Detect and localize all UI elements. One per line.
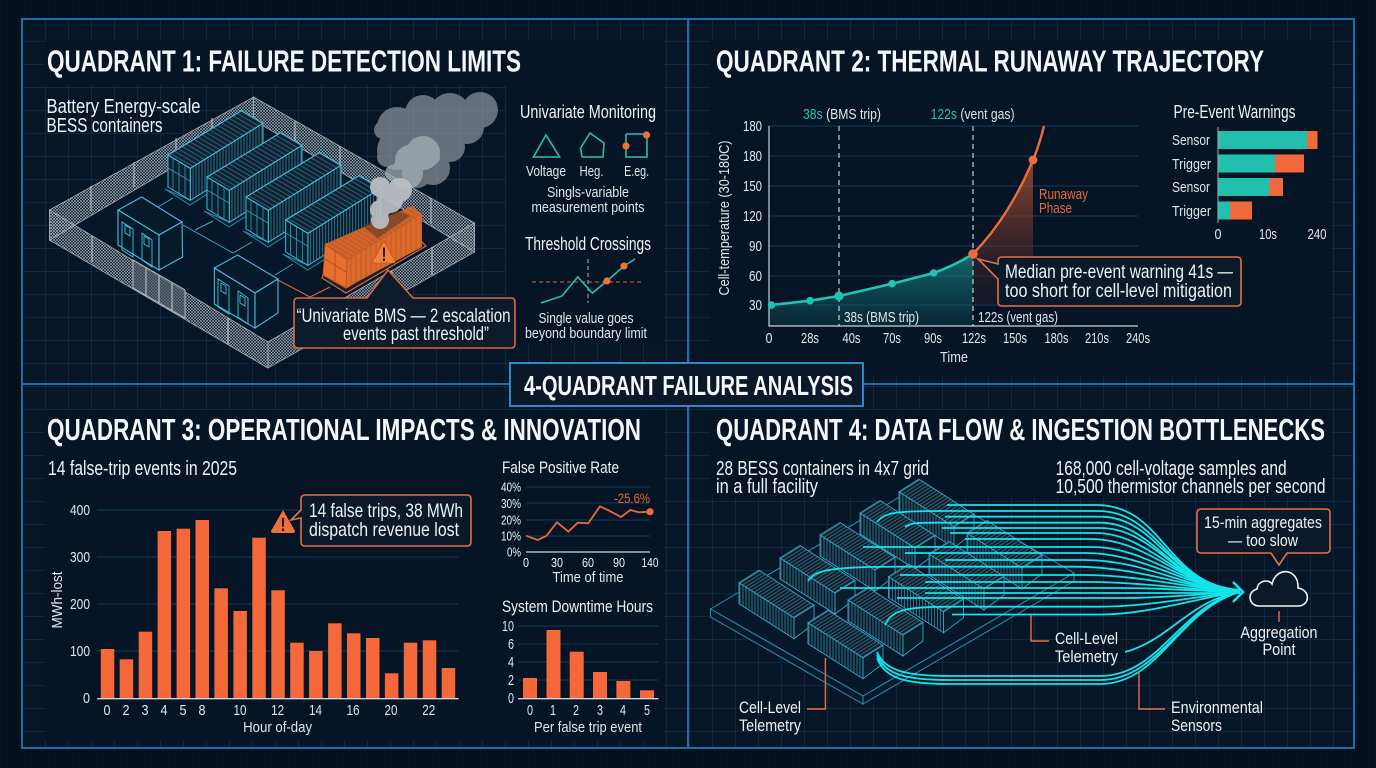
smoke plume [370, 92, 498, 229]
bar labels: Trigger [1172, 203, 1211, 220]
text: sample rate: 168,000 cell-voltage samples and [1056, 458, 1287, 480]
text: false trip count: 14 false-trip events in 2025 [48, 458, 237, 480]
text: facility caption: BESS containers [46, 115, 162, 137]
callout: 15-min aggregates: 15-min aggregates [1204, 513, 1322, 532]
callout: dispatch revenue lost: 14 false trips, 38 MWh [309, 500, 463, 522]
chart: false positive rate line: -25.6% [614, 490, 650, 506]
icon: warning triangle [373, 241, 395, 266]
subheading: threshold crossings: Threshold Crossings [525, 234, 651, 254]
callout: median warning [978, 257, 1241, 306]
icon: cloud [1250, 572, 1307, 606]
label: cell-level telemetry left: Telemetry [739, 716, 801, 735]
text: boundary note [525, 310, 648, 342]
x axis labels: 0 [104, 702, 110, 719]
icon labels [526, 163, 649, 180]
icon: heat pentagon [581, 133, 604, 157]
label: cell-level telemetry centre: Cell-Level [1055, 629, 1118, 648]
x labels: 140 [642, 555, 658, 570]
icon labels: E.eg. [624, 163, 649, 180]
y axis labels: 200 [70, 596, 90, 613]
text: facility grid: in a full facility [716, 476, 818, 498]
x axis labels: 150s [1003, 330, 1027, 347]
bar: trigger 2 [1218, 202, 1252, 220]
x axis labels [104, 702, 435, 719]
x labels [527, 702, 650, 719]
label: runaway phase: Runaway [1039, 186, 1088, 203]
illustration: fenced isometric BESS yard [50, 92, 498, 368]
x labels: 0 [523, 555, 529, 570]
icon: warning triangle: ! [382, 245, 386, 266]
x axis labels: 180s [1044, 330, 1068, 347]
text: measurement points: Singls-variable [547, 184, 629, 201]
callout: univariate BMS: events past threshold” [343, 323, 489, 345]
x axis labels: 8 [198, 702, 206, 719]
y labels [502, 618, 514, 707]
data flow lines [808, 505, 1240, 684]
icon: warning triangle: ! [280, 515, 286, 535]
label: aggregation point: Aggregation [1240, 623, 1318, 642]
marker labels top: 38s (BMS trip) [803, 106, 881, 123]
y labels: 4 [508, 654, 514, 671]
containers: healthy units [165, 111, 383, 270]
illustration: isometric container grid [710, 479, 1074, 704]
x labels: 0 [527, 702, 533, 719]
y labels [501, 480, 521, 560]
x axis labels: 90s [924, 330, 942, 347]
curve: orange section [968, 126, 1044, 259]
y axis labels: 300 [70, 549, 90, 566]
chart: threshold crossing [532, 259, 643, 303]
heading: system downtime hours: System Downtime Hours [502, 597, 653, 616]
bar labels: Trigger [1172, 156, 1211, 173]
bar: trigger 1 [1218, 154, 1304, 172]
callout: 15-min aggregates: — too slow [1228, 531, 1299, 550]
y labels: 2 [508, 672, 514, 689]
cabin front [214, 255, 278, 328]
label: environmental sensors: Environmental [1171, 698, 1263, 717]
fence [50, 97, 474, 368]
x labels: 2 [573, 702, 579, 719]
bar: sensor 2 [1218, 178, 1283, 196]
icon labels: Voltage [526, 163, 566, 180]
y axis labels: 30 [749, 297, 762, 314]
x axis labels: 14 [309, 702, 322, 719]
chart: false positive rate line [501, 480, 658, 586]
marker labels top [803, 106, 1015, 123]
y labels: 10 [502, 618, 514, 635]
arrow head [1233, 582, 1243, 602]
x axis labels: 3 [142, 702, 148, 719]
icon: voltage triangle [534, 135, 560, 157]
y axis title: MWh-lost [49, 571, 66, 628]
title badge: 4-QUADRANT FAILURE ANALYSIS [524, 370, 853, 401]
panel: Quadrant 1 failure detection limits [46, 44, 656, 368]
x title: Per false trip event [534, 719, 643, 736]
text: sample rate [1056, 458, 1326, 498]
bars [101, 520, 455, 698]
callout: median warning: Median pre-event warning 41s — [1005, 261, 1233, 283]
heading: false positive rate: False Positive Rate [502, 458, 619, 477]
y labels: 20% [501, 512, 521, 528]
x axis title: Hour of-day [243, 719, 313, 736]
x axis labels: 20 [384, 702, 398, 719]
x labels: 4 [620, 702, 626, 719]
x axis title: Time [940, 349, 968, 366]
x labels: 1 [550, 702, 556, 719]
text: boundary note: beyond boundary limit [525, 325, 648, 342]
label: runaway phase: Phase [1039, 200, 1072, 217]
y axis labels: 150 [743, 178, 762, 195]
callout: univariate BMS: “Univariate BMS — 2 escalation [296, 305, 510, 327]
text: facility grid [716, 458, 929, 498]
y axis labels: 180 [743, 148, 762, 165]
x axis labels: 240s [1126, 330, 1150, 347]
y labels: 6 [508, 636, 514, 653]
heading: pre-event warnings: Pre-Event Warnings [1174, 102, 1296, 122]
subheading: univariate monitoring: Univariate Monitoring [520, 102, 656, 122]
icon labels: Heg. [580, 163, 604, 180]
callout: median warning: too short for cell-level mitigation [1005, 280, 1232, 302]
x axis labels: 122s [962, 330, 986, 347]
y axis title: Cell-temperature (30-180C) [716, 140, 733, 296]
y axis labels: 180 [743, 118, 762, 135]
bar labels: Sensor [1172, 179, 1210, 196]
bar labels [1172, 132, 1211, 220]
panel: Quadrant 3 operational impacts [47, 412, 658, 736]
bar axis labels [1214, 226, 1326, 243]
bar axis labels: 0 [1214, 226, 1222, 243]
callout: 15-min aggregates [1197, 509, 1330, 565]
container: failing unit [322, 206, 426, 293]
platform [710, 484, 1074, 704]
callout: univariate BMS [294, 270, 515, 348]
chart: pre-event warning bars [1172, 127, 1326, 243]
x axis labels: 5 [180, 702, 186, 719]
y axis labels [70, 502, 90, 707]
x labels: 60 [582, 555, 594, 570]
icon: bracket with sensors [622, 131, 650, 157]
heading: quadrant 1: QUADRANT 1: FAILURE DETECTION LIMITS [47, 44, 521, 78]
cabin left [118, 197, 183, 270]
label: cell-level telemetry centre [1031, 615, 1118, 666]
label: environmental sensors: Sensors [1171, 716, 1222, 735]
x axis labels: 22 [422, 702, 435, 719]
text: measurement points [532, 184, 644, 216]
y labels: 0 [508, 690, 514, 707]
bar axis labels: 240 [1308, 226, 1326, 243]
x axis labels: 40s [842, 330, 860, 347]
callout: dispatch revenue lost: dispatch revenue lost [309, 519, 459, 541]
chart: downtime bars [502, 618, 658, 736]
leader: cloud to label [1278, 611, 1280, 622]
chart: MWh lost by hour [49, 502, 459, 736]
x labels: 30 [551, 555, 563, 570]
connection lines [158, 198, 330, 297]
containers [739, 479, 1042, 679]
y axis labels: 0 [83, 690, 90, 707]
y labels: 0% [507, 544, 521, 560]
x axis labels: 0 [766, 330, 772, 347]
chart: temperature versus time [716, 106, 1150, 366]
yard ground [50, 120, 474, 368]
y labels: 10% [501, 528, 521, 544]
x axis labels: 2 [122, 702, 130, 719]
y axis labels: 120 [743, 208, 762, 225]
x title: Time of time [552, 569, 624, 586]
bar axis labels: 10s [1259, 226, 1277, 243]
title badge [510, 363, 863, 406]
icon: warning triangle [271, 510, 295, 535]
y axis labels: 90 [749, 238, 762, 255]
x axis labels: 4 [160, 702, 168, 719]
area: pre-runaway [769, 254, 973, 326]
x axis labels: 70s [883, 330, 901, 347]
marker labels bottom [844, 309, 1058, 326]
y labels: 40% [501, 480, 521, 494]
label: environmental sensors [1139, 672, 1263, 735]
label: cell-level telemetry left [739, 658, 825, 735]
label: aggregation point: Point [1262, 640, 1296, 659]
label: runaway phase [1039, 186, 1088, 217]
bar: sensor 1 [1218, 131, 1318, 149]
bar labels: Sensor [1172, 132, 1210, 149]
y axis labels: 100 [70, 643, 90, 660]
text: facility grid: 28 BESS containers in 4x7 grid [716, 458, 929, 480]
y axis labels: 60 [749, 268, 762, 285]
text: boundary note: Single value goes [538, 310, 634, 327]
text: facility caption: Battery Energy-scale [46, 96, 200, 118]
x labels: 90 [613, 555, 625, 570]
callout: dispatch revenue lost [291, 495, 471, 546]
label: cell-level telemetry centre: Telemetry [1055, 647, 1118, 666]
text: facility caption [46, 96, 200, 137]
x axis labels: 16 [346, 702, 360, 719]
area: runaway [973, 160, 1033, 306]
marker labels top: 122s (vent gas) [931, 106, 1015, 123]
x labels: 5 [644, 702, 650, 719]
marker labels bottom: 122s (vent gas) [978, 309, 1058, 326]
x axis labels: 210s [1085, 330, 1109, 347]
text: measurement points: measurement points [532, 199, 644, 216]
y axis labels [743, 118, 762, 314]
marker labels bottom: 38s (BMS trip) [844, 309, 919, 326]
x axis labels: 28s [801, 330, 819, 347]
curve: teal section [768, 254, 973, 309]
x axis labels: 12 [271, 702, 284, 719]
x axis labels [766, 330, 1150, 347]
heading: quadrant 3: QUADRANT 3: OPERATIONAL IMPACTS & INNOVATION [47, 412, 641, 447]
x labels: 3 [597, 702, 603, 719]
label: cell-level telemetry left: Cell-Level [739, 698, 801, 717]
y axis labels: 400 [70, 502, 90, 519]
x axis labels: 10 [234, 702, 246, 719]
x labels [523, 555, 658, 570]
panel: Quadrant 4 data flow [710, 412, 1330, 735]
label: aggregation point [1240, 623, 1318, 659]
y labels: 30% [501, 496, 521, 511]
panel: Quadrant 2 thermal runaway trajectory [716, 44, 1326, 366]
